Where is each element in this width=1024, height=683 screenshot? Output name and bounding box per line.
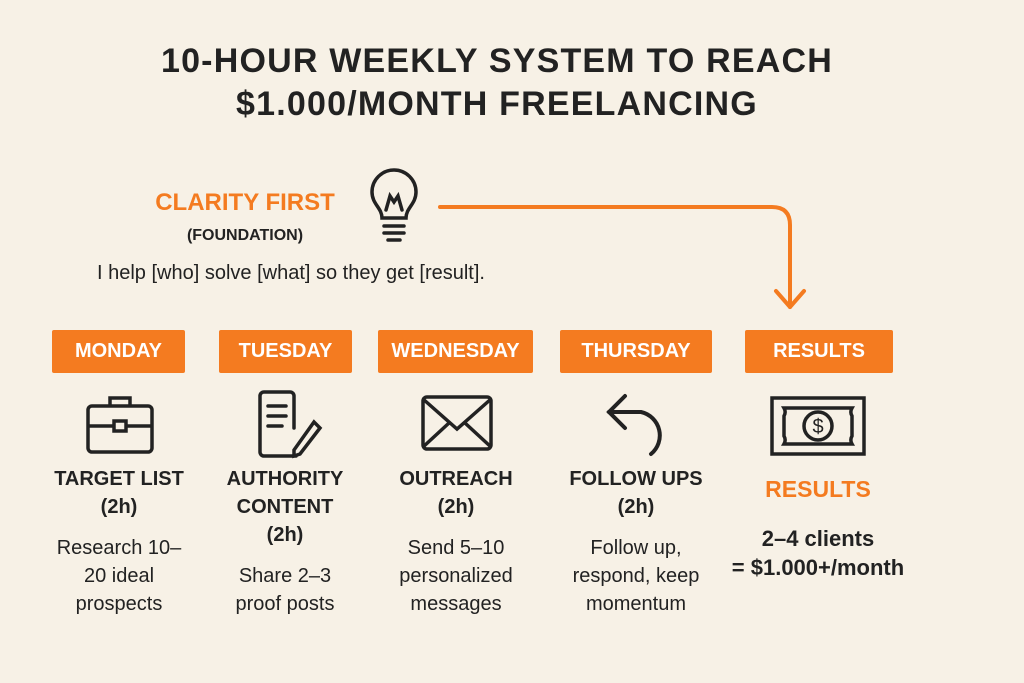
tag: wednesday: WEDNESDAY [391, 340, 520, 362]
column: monday [54, 468, 184, 615]
column: results [732, 476, 904, 580]
tag: tuesday [219, 330, 352, 373]
heading: clarity first [155, 189, 335, 244]
arrow: clarity to results [438, 205, 806, 310]
column: thursday: FOLLOW UPS [569, 468, 703, 490]
text: positioning statement: I help [who] solve [what] so they get [result]. [97, 262, 485, 284]
column: wednesday: (2h) [438, 496, 474, 518]
tag: thursday [560, 330, 712, 373]
column: thursday: respond, keep [573, 565, 699, 587]
tag: results: RESULTS [773, 340, 865, 362]
title: 10-HOUR WEEKLY SYSTEM TO REACH [161, 42, 833, 80]
icon: document with pen [258, 390, 322, 458]
column: wednesday [399, 468, 513, 615]
icon: envelope [421, 395, 493, 451]
tag: thursday: THURSDAY [581, 340, 691, 362]
column: tuesday: (2h) [267, 524, 303, 546]
column: tuesday [227, 468, 343, 615]
column: thursday: Follow up, [590, 537, 682, 559]
column: results: RESULTS [765, 476, 871, 502]
column: tuesday: CONTENT [237, 496, 333, 518]
title: $1.000/MONTH FREELANCING [236, 85, 758, 123]
tag: wednesday [378, 330, 533, 373]
title [161, 42, 833, 123]
column: monday: TARGET LIST [54, 468, 184, 490]
column: results: 2–4 clients [762, 526, 874, 551]
icon: banknote [770, 396, 866, 456]
column: monday: Research 10– [57, 537, 181, 559]
column: tuesday: AUTHORITY [227, 468, 343, 490]
heading: clarity first: CLARITY FIRST [155, 189, 335, 216]
column: tuesday: proof posts [236, 593, 334, 615]
tag: tuesday: TUESDAY [239, 340, 332, 362]
column: thursday: (2h) [618, 496, 654, 518]
icon: banknote: $ [812, 416, 824, 438]
column: wednesday: messages [410, 593, 502, 615]
column: wednesday: OUTREACH [399, 468, 513, 490]
column: thursday: momentum [586, 593, 686, 615]
icon: briefcase [86, 396, 154, 454]
column: wednesday: Send 5–10 [408, 537, 504, 559]
icon: lightbulb [370, 168, 418, 242]
column: results: = $1.000+/month [732, 555, 904, 580]
tag: results [745, 330, 893, 373]
column: tuesday: Share 2–3 [239, 565, 331, 587]
tag: monday: MONDAY [75, 340, 162, 362]
column: thursday [569, 468, 703, 615]
column: wednesday: personalized [399, 565, 513, 587]
tag: monday [52, 330, 185, 373]
column: monday: prospects [76, 593, 162, 615]
column: monday: 20 ideal [84, 565, 154, 587]
column: monday: (2h) [101, 496, 137, 518]
icon: reply arrow [606, 394, 662, 456]
heading: clarity first: (FOUNDATION) [187, 227, 303, 244]
